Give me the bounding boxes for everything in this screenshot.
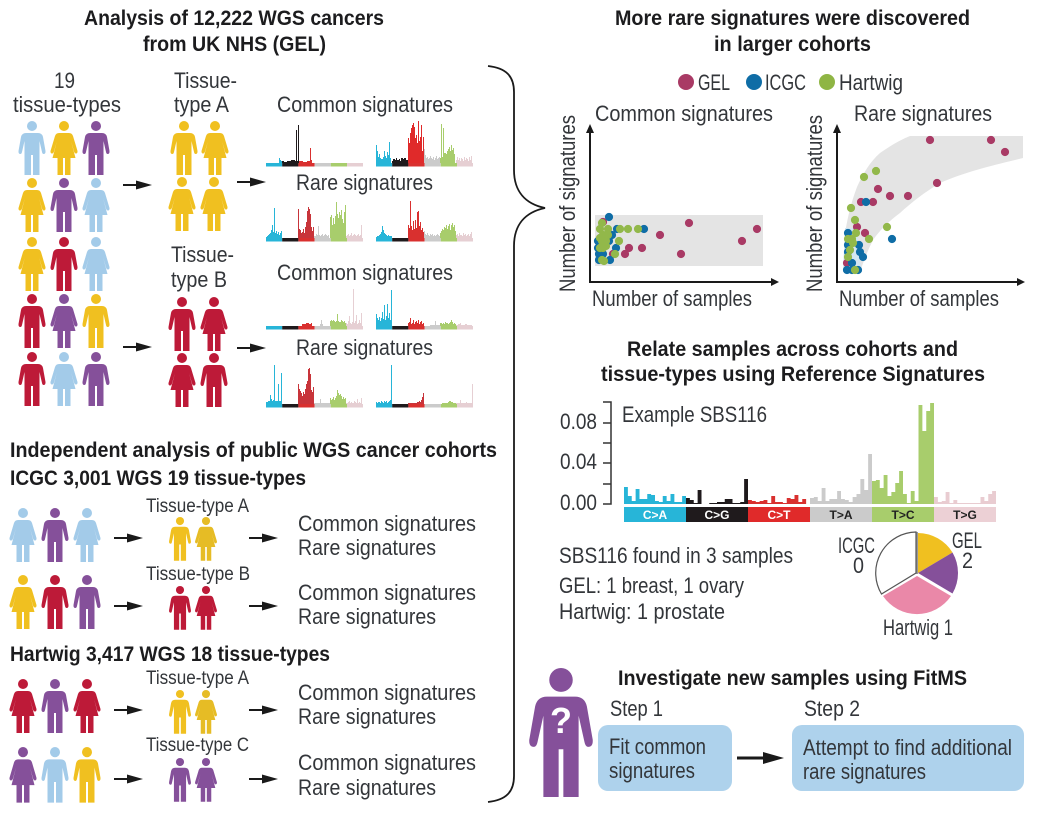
- signature chart B common 1: [266, 289, 363, 330]
- labels: common and rare: [298, 680, 476, 729]
- icon: person with question mark: [529, 668, 593, 797]
- pie chart: SBS116 by cohort: Hartwig 1: [883, 615, 953, 640]
- labels: common and rare: Rare signatures: [298, 604, 436, 629]
- heading: tissue-type A: type A: [174, 92, 229, 117]
- people: ICGC tissue-type A: [169, 517, 217, 561]
- title: analysis of WGS cancers: from UK NHS (GEL): [143, 33, 326, 56]
- labels: common and rare: Rare signatures: [298, 535, 436, 560]
- legend: cohorts: Hartwig: [839, 70, 903, 95]
- label: tissue-type B: Tissue-type B: [146, 564, 250, 585]
- people: tissue-type A: [168, 121, 229, 231]
- bar chart: example SBS116: [560, 402, 996, 522]
- arrow: [123, 342, 152, 352]
- labels: common and rare: [298, 750, 476, 800]
- heading: tissue-type B: [171, 242, 234, 292]
- legend: cohorts: [678, 70, 903, 95]
- box: step 1: [598, 725, 732, 791]
- labels: common and rare: Rare signatures: [298, 704, 436, 729]
- text block: SBS116 sample counts: GEL: 1 breast, 1 ovary: [559, 573, 744, 598]
- label: step 1: Step 1: [610, 696, 663, 721]
- pie chart: SBS116 by cohort: [838, 528, 982, 640]
- scatter plot: rare signatures: Number of samples: [839, 286, 999, 311]
- scatter plot: rare signatures: Number of signatures: [802, 115, 827, 292]
- arrow: [249, 706, 278, 714]
- people: ICGC row 1: [9, 508, 101, 562]
- signature chart A rare 1: [266, 202, 363, 242]
- labels: common and rare: [298, 580, 476, 629]
- bar chart: example SBS116: C>T: [767, 508, 791, 522]
- people grid: 19 tissue types: [18, 121, 110, 406]
- scatter plot: rare signatures: [802, 101, 1025, 311]
- bar chart: example SBS116: T>G: [953, 508, 977, 522]
- arrow: [114, 706, 143, 714]
- scatter plot: common signatures: [555, 101, 779, 311]
- arrow: [114, 774, 143, 784]
- box: step 1: Fit common: [609, 734, 706, 759]
- bar chart: example SBS116: C>A: [643, 508, 668, 522]
- signature chart A common 2: [376, 121, 473, 166]
- heading: independent analysis: Independent analysis of public WGS cancer cohorts: [10, 439, 497, 462]
- bar chart: example SBS116: C>G: [704, 508, 730, 522]
- label: tissue-type C: Tissue-type C: [146, 735, 249, 756]
- title: more rare signatures: More rare signatures were discovered: [615, 7, 970, 30]
- heading: 19 tissue-types: 19: [54, 68, 75, 93]
- labels: common and rare: Rare signatures: [298, 775, 436, 800]
- pie chart: SBS116 by cohort: 0: [853, 553, 864, 578]
- icon: person with question mark: ?: [550, 700, 572, 741]
- arrow: [249, 602, 278, 610]
- heading: Hartwig cohort: Hartwig 3,417 WGS 18 tissue-types: [10, 643, 330, 666]
- scatter plot: common signatures: Common signatures: [595, 101, 773, 126]
- people: tissue-type B: [168, 297, 228, 407]
- heading: tissue-type A: Tissue-: [174, 68, 237, 93]
- bar chart: example SBS116: T>A: [829, 508, 853, 522]
- label: step 2: Step 2: [804, 696, 860, 721]
- arrow: step 1 to step 2: [737, 752, 784, 764]
- signature chart A rare 2: [376, 201, 473, 242]
- signature chart A common 1: [266, 125, 363, 166]
- heading: 19 tissue-types: [13, 68, 121, 117]
- title: analysis of WGS cancers: Analysis of 12,222 WGS cancers: [84, 7, 384, 30]
- heading: tissue-type B: type B: [171, 267, 227, 292]
- heading: ICGC cohort: ICGC 3,001 WGS 19 tissue-types: [10, 467, 306, 490]
- bar chart: example SBS116: 0.04: [560, 449, 597, 474]
- legend: cohorts: ICGC: [765, 70, 806, 95]
- bar chart: example SBS116: T>C: [891, 508, 915, 522]
- pie chart: SBS116 by cohort: GEL: [952, 528, 982, 553]
- box: step 2: rare signatures: [803, 759, 926, 784]
- label: tissue-type A: Tissue-type A: [146, 668, 249, 689]
- labels: common and rare: [298, 511, 476, 560]
- labels: common and rare: Common signatures: [298, 580, 476, 605]
- scatter plot: common signatures: Number of signatures: [555, 115, 580, 292]
- arrow: [249, 534, 278, 542]
- people: ICGC row 2: [9, 575, 101, 629]
- labels: common and rare: Common signatures: [298, 680, 476, 705]
- brace connecting left analysis to right results: [488, 66, 545, 802]
- title: analysis of WGS cancers: [84, 7, 384, 56]
- people: Hartwig row 1: [9, 679, 101, 733]
- label: common signatures A: Common signatures: [277, 92, 453, 117]
- scatter plot: rare signatures: Rare signatures: [854, 101, 992, 126]
- people: ICGC tissue-type B: [169, 586, 217, 630]
- labels: common and rare: Common signatures: [298, 750, 476, 775]
- label: rare signatures B: Rare signatures: [296, 335, 433, 360]
- title: relate samples: [601, 338, 985, 386]
- pie chart: SBS116 by cohort: 2: [962, 548, 973, 573]
- title: investigate new samples: Investigate new samples using FitMS: [618, 667, 967, 690]
- label: common signatures B: Common signatures: [277, 260, 453, 285]
- box: step 1: signatures: [609, 758, 695, 783]
- signature chart B rare 1: [266, 365, 363, 408]
- title: relate samples: tissue-types using Reference Signatures: [601, 363, 985, 386]
- people: Hartwig tissue-type A: [169, 690, 217, 734]
- labels: common and rare: Common signatures: [298, 511, 476, 536]
- box: step 2: Attempt to find additional: [803, 735, 1012, 760]
- pie chart: SBS116 by cohort: ICGC: [838, 533, 875, 558]
- signature chart B rare 2: [376, 365, 473, 408]
- text block: SBS116 sample counts: [559, 543, 793, 624]
- heading: tissue-type B: Tissue-: [171, 242, 234, 267]
- bar chart: example SBS116: 0.00: [560, 490, 597, 515]
- arrow: [123, 180, 152, 190]
- bar chart: example SBS116: 0.08: [560, 409, 597, 434]
- text block: SBS116 sample counts: Hartwig: 1 prostate: [559, 599, 725, 624]
- scatter plot: common signatures: Number of samples: [592, 286, 752, 311]
- signature chart B common 2: [376, 290, 473, 330]
- label: rare signatures A: Rare signatures: [296, 170, 433, 195]
- title: more rare signatures: in larger cohorts: [714, 33, 871, 56]
- people: Hartwig row 2: [9, 747, 101, 803]
- box: step 2: [792, 725, 1024, 791]
- bar chart: example SBS116: Example SBS116: [622, 402, 767, 427]
- text block: SBS116 sample counts: SBS116 found in 3 samples: [559, 543, 793, 568]
- arrow: [237, 344, 266, 352]
- legend: cohorts: GEL: [698, 70, 730, 95]
- heading: 19 tissue-types: tissue-types: [13, 92, 121, 117]
- arrow: [249, 774, 278, 784]
- arrow: [237, 178, 266, 186]
- label: tissue-type A: Tissue-type A: [146, 496, 249, 517]
- arrow: [114, 534, 143, 542]
- arrow: [114, 602, 143, 610]
- title: relate samples: Relate samples across cohorts and: [627, 338, 958, 361]
- people: Hartwig tissue-type C: [169, 758, 217, 802]
- heading: tissue-type A: [174, 68, 237, 117]
- title: more rare signatures: [615, 7, 970, 56]
